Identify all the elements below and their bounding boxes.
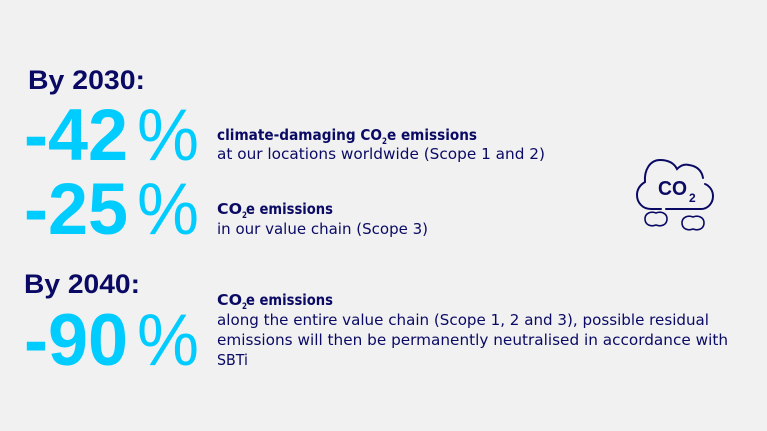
text: full value chain emissions target: CO	[217, 291, 242, 309]
stat: -90%: -90	[24, 300, 128, 381]
stat: -90%	[24, 300, 199, 381]
text: value chain emissions target	[217, 200, 428, 238]
text: location emissions target: at our locations worldwide (Scope 1 and 2)	[217, 145, 545, 163]
text: full value chain emissions target: along the entire value chain (Scope 1, 2 and 3), possible residual	[217, 311, 709, 329]
text: full value chain emissions target: e emissions	[246, 291, 333, 309]
text: location emissions target: e emissions	[387, 126, 477, 144]
heading: By 2040: By 2040:	[24, 269, 140, 299]
stat: -42%: -42	[24, 95, 128, 176]
text: value chain emissions target: in our value chain (Scope 3)	[217, 220, 428, 238]
text: location emissions target: climate-damaging CO	[217, 126, 382, 144]
icon: CO2 cloud	[637, 160, 713, 230]
stat: -42%: %	[137, 95, 199, 176]
text: location emissions target: 2	[382, 137, 387, 147]
text: value chain emissions target: 2	[242, 211, 247, 221]
stat: -90%: %	[137, 300, 199, 381]
text: full value chain emissions target	[217, 291, 728, 369]
text: full value chain emissions target: SBTi	[217, 351, 248, 369]
text: value chain emissions target: e emissions	[246, 200, 333, 218]
text: full value chain emissions target: emissions will then be permanently neutralised in accordance with	[217, 331, 728, 349]
stat: -42%	[24, 95, 199, 176]
stat: -25%	[24, 169, 199, 250]
stat: -25%: -25	[24, 169, 128, 250]
text: full value chain emissions target: 2	[242, 302, 247, 312]
stat: -25%: %	[137, 169, 199, 250]
heading: By 2030: By 2030:	[28, 65, 145, 95]
text: value chain emissions target: CO	[217, 200, 242, 218]
icon: CO2 cloud: 2	[689, 191, 696, 205]
icon: CO2 cloud: CO	[658, 178, 687, 200]
text: location emissions target	[217, 126, 545, 163]
